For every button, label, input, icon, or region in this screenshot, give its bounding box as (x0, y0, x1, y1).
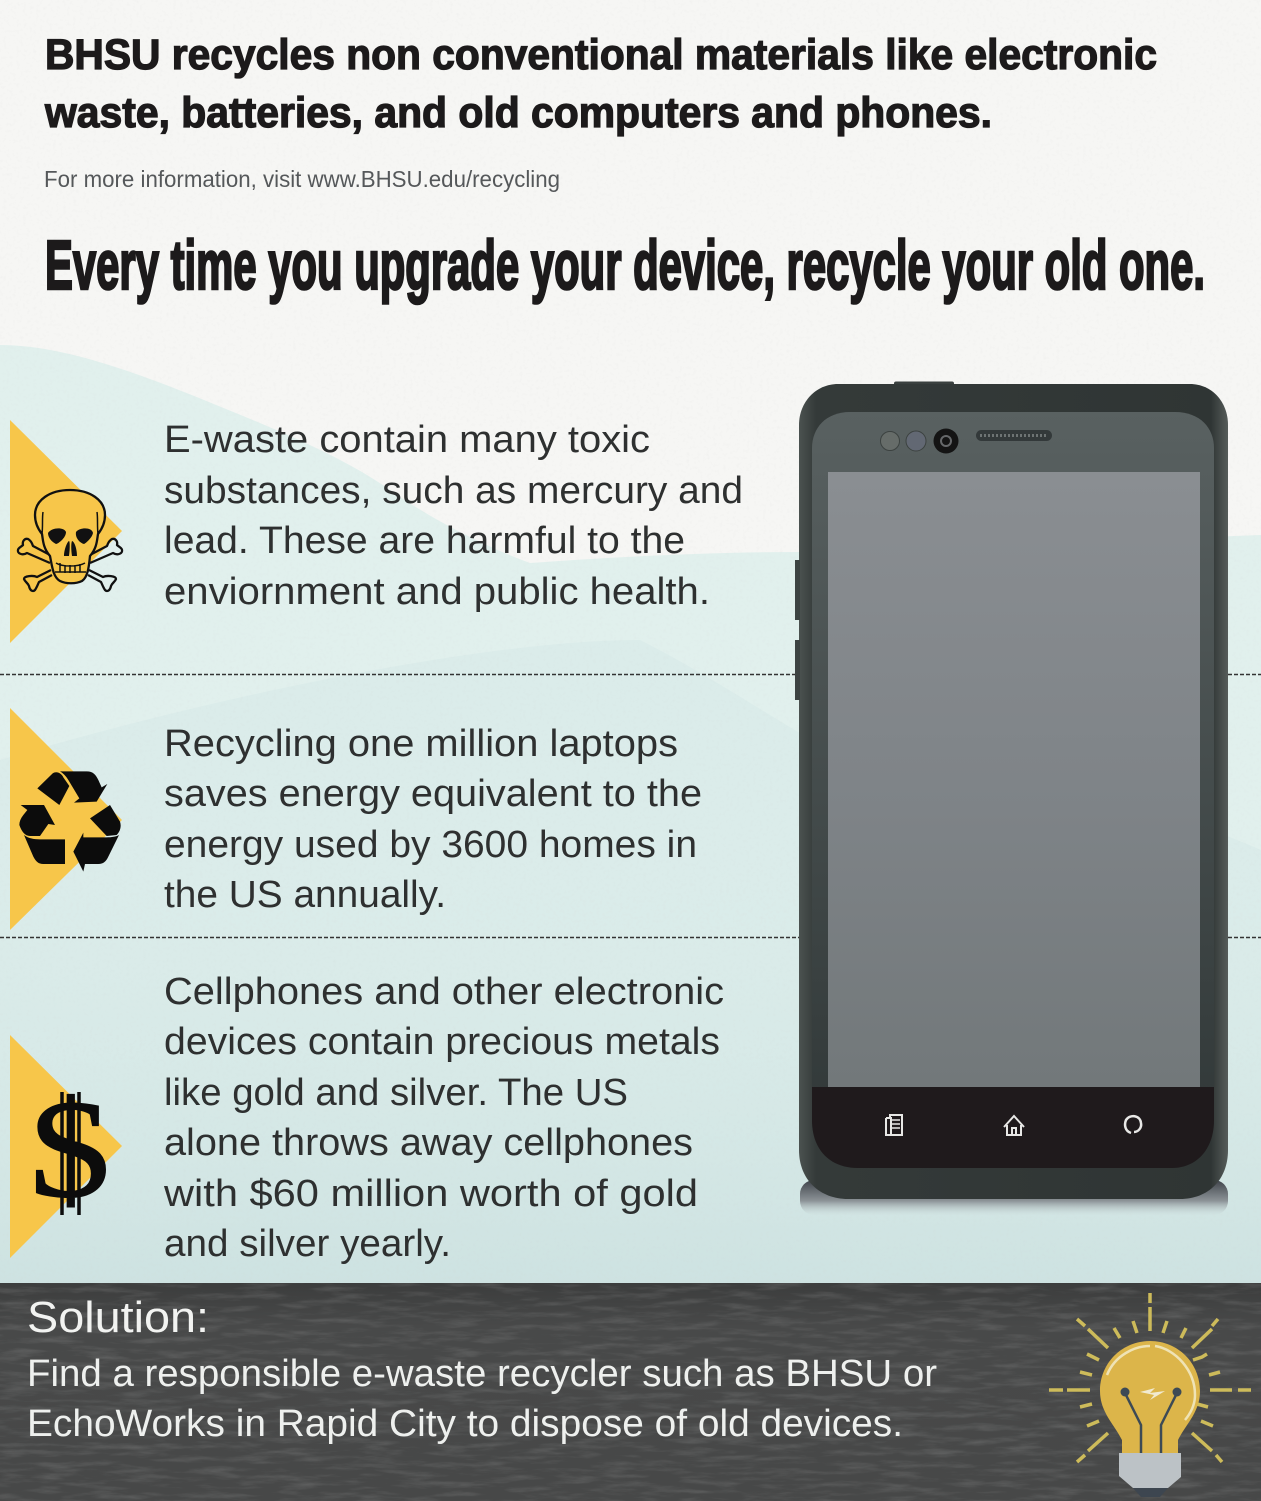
text: recycling laptops: the US annually. (164, 874, 446, 916)
text: recycling laptops: Recycling one million laptops (164, 723, 678, 765)
text: solution (27, 1293, 937, 1445)
text: solution: EchoWorks in Rapid City to dispose of old devices. (27, 1403, 903, 1445)
background hills (0, 345, 1261, 1290)
more information line: For more information, visit www.BHSU.edu/recycling (44, 166, 560, 192)
heading: non conventional materials: BHSU recycles non conventional materials like electronic (45, 31, 1157, 79)
text: precious metals: alone throws away cellphones (164, 1122, 693, 1164)
icon: recycling symbol (10, 708, 122, 930)
phone shadow (800, 1180, 1228, 1215)
text: precious metals: with $60 million worth of gold (163, 1173, 698, 1215)
icon: light bulb (1049, 1293, 1251, 1497)
navigation icons (886, 1115, 1141, 1135)
side buttons (795, 560, 800, 700)
text: toxic substances (164, 419, 743, 613)
camera and speaker (880, 428, 1052, 454)
text: solution: Solution: (27, 1293, 209, 1342)
text: toxic substances: lead. These are harmful to the (164, 520, 685, 562)
icon: dollar sign (10, 1035, 122, 1258)
phone face (812, 412, 1214, 1168)
icon: skull and crossbones (10, 420, 122, 643)
text: recycling laptops: energy used by 3600 homes in (164, 824, 697, 866)
text: precious metals: like gold and silver. The US (164, 1072, 628, 1114)
text: precious metals: and silver yearly. (164, 1223, 451, 1265)
phone top button (894, 382, 954, 388)
dashed dividers (0, 674, 1261, 938)
heading: non conventional materials (44, 31, 1157, 137)
text: solution: Find a responsible e-waste recycler such as BHSU or (27, 1353, 937, 1395)
illustration: smartphone (795, 382, 1228, 1215)
heading: non conventional materials: waste, batteries, and old computers and phones. (44, 89, 992, 137)
text: recycling laptops (164, 723, 702, 916)
text: toxic substances: E-waste contain many toxic (164, 419, 650, 461)
panel: precious metals (10, 971, 724, 1265)
phone screen (828, 472, 1200, 1087)
panel: solution chalkboard (0, 1283, 1261, 1501)
phone chin (812, 1087, 1214, 1168)
icon: dollar sign: $ (30, 1072, 110, 1227)
text: recycling laptops: saves energy equivalent to the (164, 773, 702, 815)
text: toxic substances: substances, such as mercury and (164, 470, 743, 512)
text: precious metals: Cellphones and other electronic (164, 971, 724, 1013)
phone body (799, 384, 1228, 1199)
text: precious metals: devices contain precious metals (164, 1021, 720, 1063)
text: toxic substances: enviornment and public health. (164, 571, 710, 613)
text: precious metals (163, 971, 724, 1265)
panel: recycling laptops (10, 708, 702, 930)
panel: toxic substances (10, 419, 743, 643)
